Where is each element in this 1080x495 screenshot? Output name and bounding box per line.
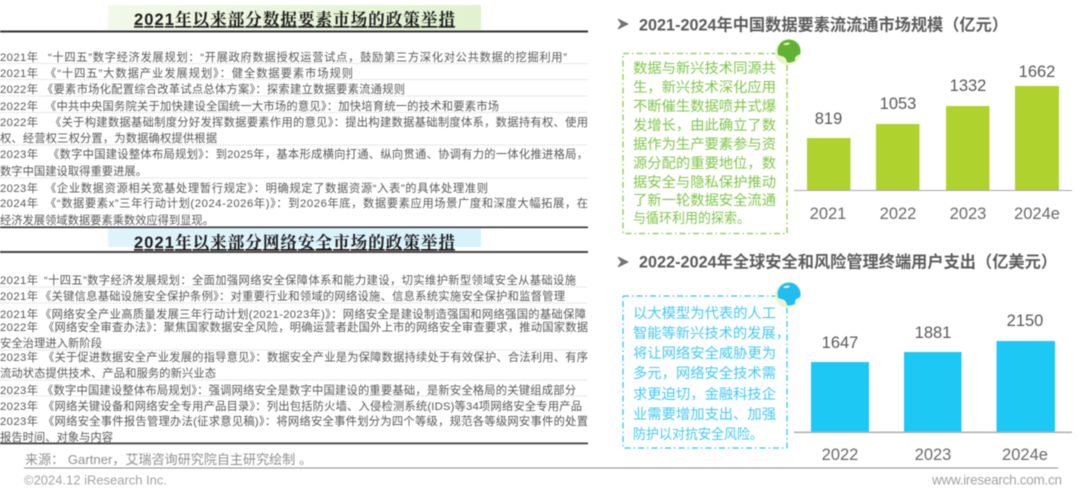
policy list: cybersecurity: 《网络安全审查办法》：聚焦国家数据安全风险，明确运营者赴国外上市的网络安全审查要求，推动国家数据 — [43, 320, 588, 334]
bar chart: data circulation market size: 2024e — [1014, 205, 1060, 223]
bar chart: data circulation market size — [794, 63, 1072, 223]
callout: data and emerging technology: 源分配的重要地位，数 — [633, 155, 776, 172]
policy list: data elements: 《关于构建数据基础制度分好发挥数据要素作用的意见》：提出构建数据基础制度体系，数据持有权、使用 — [50, 115, 588, 129]
callout: data and emerging technology: 据安全与隐私保护推动 — [633, 173, 776, 191]
heading: data element policies: 2021年以来部分数据要素市场的政策举措 — [134, 9, 456, 29]
chart title: China data circulation market size: 2021-2024年中国数据要素流流通市场规模（亿元） — [639, 16, 1008, 34]
bar chart: security end-user spending: 2150 — [1007, 312, 1043, 330]
callout: AI and network security — [623, 296, 790, 448]
policy list: cybersecurity: 《数字中国建设整体布局规划》：强调网络安全是数字中国建设的重要基础，是新安全格局的关键组成部分 — [42, 383, 576, 397]
policy list: cybersecurity: 2022年 — [0, 320, 38, 334]
policy list: cybersecurity: 《关于促进数据安全产业发展的指导意见》：数据安全产业是为保障数据持续处于有效保护、合法利用、有序 — [43, 350, 588, 364]
bar chart: security end-user spending: 2022 — [822, 446, 858, 464]
policy list: data elements: 《要素市场化配置综合改革试点总体方案》：探索建立数据要素流通规则 — [42, 82, 405, 96]
callout: AI and network security: 业需要增加支出、加强 — [633, 406, 776, 423]
heading: cybersecurity policies: 2021年以来部分网络安全市场的政策举措 — [134, 232, 456, 252]
policy list: data elements: “十四五”数字经济发展规划：“开展政府数据授权运营试点，鼓励第三方深化对公共数据的挖掘利用” — [48, 50, 567, 64]
policy list: data elements: 2023年 — [0, 147, 38, 161]
callout: AI and network security: 求更迫切，金融科技企 — [633, 385, 776, 403]
policy list: cybersecurity: 《网络关键设备和网络安全专用产品目录》：列出包括防火墙、入侵检测系统(IDS)等34项网络安全专用产品 — [43, 399, 582, 413]
policy list: data elements: 《“数据要素x”三年行动计划(2024-2026年)》：到2026年底，数据要素应用场景广度和深度大幅拓展，在 — [45, 196, 588, 210]
policy list: cybersecurity: 流动状态提供技术、产品和服务的新兴业态 — [0, 366, 216, 380]
policy list: data elements: 2024年 — [0, 196, 38, 210]
panel: data element policies — [0, 5, 588, 228]
policy list: cybersecurity: 《网络安全产业高质量发展三年行动计划(2021-2023年)》：网络安全是建设制造强国和网络强国的基础保障 — [40, 307, 586, 321]
bar chart: data circulation market size: 2022 — [880, 205, 916, 223]
callout: data and emerging technology: 与循环利用的探索。 — [633, 210, 750, 227]
policy list: data elements: 《企业数据资源相关宽基处理暂行规定》：明确规定了数据资源“入表”的具体处理准则 — [45, 181, 488, 195]
policy list: cybersecurity: “十四五”数字经济发展规划：全面加强网络安全保障体系和能力建设，切实维护新型领域安全从基础设施 — [44, 273, 576, 287]
bar chart: data circulation market size: 2021 — [810, 205, 846, 223]
policy list: cybersecurity: 安全治理进入新阶段 — [0, 336, 102, 350]
footer: copyright: ©2024.12 iResearch Inc. — [24, 472, 167, 488]
callout: AI and network security: 将让网络安全威胁更为 — [633, 344, 776, 362]
heading: data element policies — [0, 5, 588, 32]
policy list: cybersecurity: 2023年 — [0, 383, 38, 397]
policy list: data elements: 2022年 — [0, 115, 38, 129]
bar chart: data circulation market size: 2023 — [950, 205, 986, 223]
policy list: cybersecurity: 报告时间、对象与内容 — [0, 430, 113, 444]
policy list: data elements: 2023年 — [0, 181, 38, 195]
policy list: cybersecurity: 2023年 — [0, 350, 38, 364]
icon: green globe — [775, 39, 801, 65]
icon: blue globe — [775, 282, 801, 308]
callout: AI and network security: 以大模型为代表的人工 — [633, 305, 776, 322]
bar chart: security end-user spending: 2023 — [915, 446, 951, 464]
panel: cybersecurity policies — [0, 228, 588, 444]
policy list: data elements: 2021年 — [0, 66, 38, 80]
bar chart: data circulation market size: 819 — [815, 110, 842, 128]
callout: data and emerging technology: 了新一轮数据安全流通 — [633, 191, 776, 209]
heading: cybersecurity policies — [0, 228, 588, 253]
callout: AI and network security: 防护以对抗安全风险。 — [633, 425, 763, 443]
policy list: data elements: 2022年 — [0, 82, 38, 96]
source note: 来源： Gartner，艾瑞咨询研究院自主研究绘制 。 — [25, 452, 312, 467]
callout: data and emerging technology — [623, 54, 787, 234]
bar chart: data circulation market size: 1332 — [950, 77, 986, 95]
callout: data and emerging technology: 发增长，由此确立了数 — [633, 117, 776, 134]
callout: data and emerging technology: 据作为生产要素参与资 — [633, 136, 776, 153]
policy list: data elements: 经济发展领域数据要素乘数效应得到显现。 — [0, 213, 214, 227]
policy list: data elements: 《“十四五”大数据产业发展规划》：健全数据要素市场规则 — [45, 66, 353, 80]
policy list: cybersecurity: 《关键信息基础设施安全保护条例》：对重要行业和领域的网络设施、信息系统实施安全保护和监督管理 — [40, 289, 565, 303]
policy list: cybersecurity: 《网络安全事件报告管理办法(征求意见稿)》：将网络安全事件划分为四个等级，规范各等级网安事件的处置 — [43, 414, 588, 428]
bar chart: security end-user spending: 2024e — [1002, 446, 1048, 464]
bar chart: data circulation market size: 1053 — [880, 95, 916, 113]
bar chart: security end-user spending — [794, 312, 1072, 464]
policy list: cybersecurity: 2023年 — [0, 399, 38, 413]
footer rule — [24, 468, 1058, 469]
bar chart: security end-user spending: 1881 — [915, 324, 951, 342]
callout: AI and network security: 智能等新兴技术的发展， — [633, 324, 790, 342]
policy list: data elements: 权、经营权三权分置，为数据确权提供根据 — [0, 131, 217, 145]
policy list: data elements: 2022年 — [0, 99, 38, 113]
policy list: cybersecurity: 2021年 — [0, 307, 38, 321]
callout: data and emerging technology: 不断催生数据喷井式爆 — [633, 98, 776, 115]
policy list: cybersecurity: 2021年 — [0, 289, 38, 303]
callout: data and emerging technology: 数据与新兴技术同源共 — [633, 60, 776, 77]
footer: website: www.iresearch.com.cn — [931, 472, 1062, 488]
policy list: cybersecurity: 2023年 — [0, 414, 38, 428]
policy list: data elements: 《中共中央国务院关于加快建设全国统一大市场的意见》：加快培育统一的技术和要素市场 — [45, 99, 499, 113]
policy list: data elements — [0, 50, 588, 228]
callout: data and emerging technology: 生，新兴技术深化应用 — [633, 78, 776, 96]
policy list: data elements: 2021年 — [0, 50, 38, 64]
policy list: data elements: 数字中国建设取得重要进展。 — [0, 164, 147, 178]
bar chart: data circulation market size: 1662 — [1019, 63, 1055, 81]
bar chart: security end-user spending: 1647 — [822, 334, 858, 352]
chart title: global security spending: 2022-2024年全球安全和风险管理终端用户支出（亿美元） — [639, 252, 1057, 272]
policy list: cybersecurity — [0, 273, 588, 444]
policy list: cybersecurity: 2021年 — [0, 273, 38, 287]
callout: AI and network security: 多元，网络安全技术需 — [633, 364, 776, 382]
policy list: data elements: 《数字中国建设整体布局规划》：到2025年，基本形成横向打通、纵向贯通、协调有力的一体化推进格局， — [48, 147, 588, 161]
